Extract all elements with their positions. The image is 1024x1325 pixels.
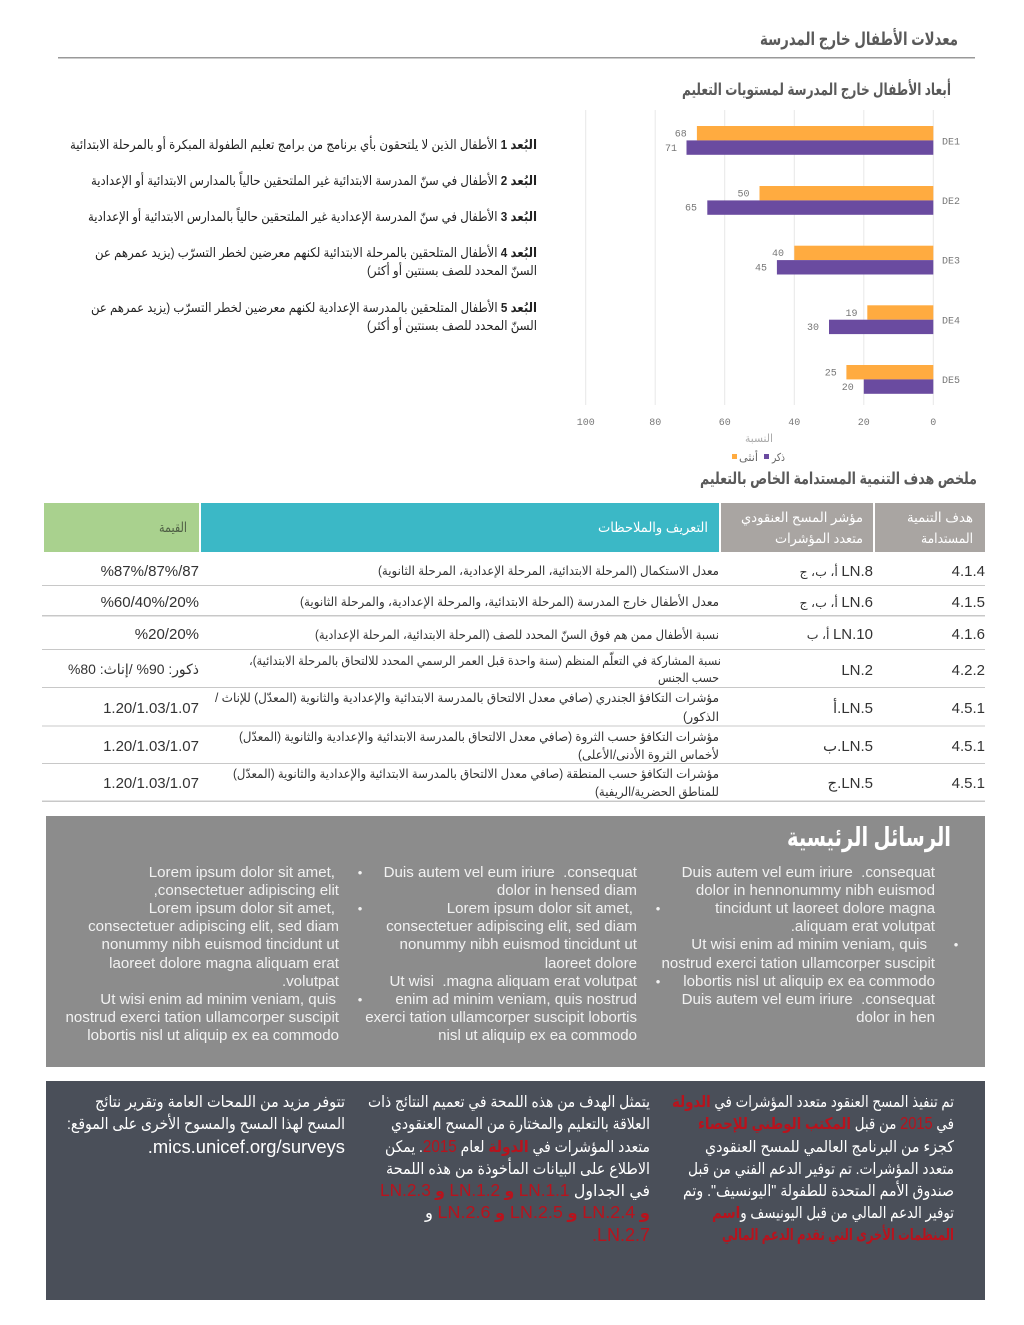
row 4.5.1 gender [103, 691, 985, 725]
row 4.5.1 region: مؤشرات التكافؤ حسب المنطقة (صافي معدل الالتحاق بالمدرسة الابتدائية والإعدادية والثانوية (المعدّل) [233, 767, 719, 782]
category labels: DE3 [942, 256, 960, 268]
row 4.1.5: %60/40%/20% [101, 594, 199, 611]
value labels: 19 [845, 309, 858, 320]
value labels: 71 [665, 144, 677, 155]
row 4.2.2: LN.2 [841, 662, 873, 679]
text block: dimension definitions: البُعد 1 الأطفال الذين لا يلتحقون بأي برنامج من برامج تعليم الطفولة المبكرة أو بالمرحلة الابتدائية [70, 135, 537, 153]
table header: هدف التنمية [907, 510, 973, 525]
row 4.1.4: %87%/87%/87 [101, 563, 199, 580]
axis labels: 80 [649, 418, 661, 429]
key messages: right column: .aliquam erat volutpat [791, 918, 936, 935]
key messages: left column: Lorem ipsum dolor sit amet, [149, 864, 335, 881]
survey notes: middle column: و LN.2.4 و LN.2.5 و LN.2.6 و [424, 1202, 650, 1223]
bar chart [577, 110, 960, 464]
key messages: middle column: exerci tation ullamcorper suscipit lobortis [365, 1009, 637, 1026]
table row lines [42, 585, 985, 802]
row 4.5.1 region [103, 767, 985, 800]
row 4.1.5 [101, 594, 985, 611]
row 4.5.1 wealth: 4.5.1 [952, 738, 985, 755]
survey notes: right column [672, 1094, 954, 1245]
survey notes: middle column: في الجداول LN.1.1 و LN.1.2 و LN.2.3 [380, 1180, 650, 1201]
survey notes: right column: في 2015 من قبل المكتب الوطني للإحصاء [698, 1113, 954, 1134]
axis labels: 40 [788, 418, 800, 429]
value labels: 30 [807, 323, 819, 334]
key messages: middle column: Lorem ipsum dolor sit amet, [447, 900, 633, 917]
table header [44, 503, 985, 552]
key messages: left column: ,consectetuer adipiscing elit [154, 882, 340, 899]
key messages: middle column: laoreet dolore [545, 955, 637, 972]
row 4.1.5: 4.1.5 [952, 594, 985, 611]
axis labels: 20 [858, 418, 870, 429]
key messages: left column [66, 864, 340, 1044]
text block: dimension definitions: البُعد 2 الأطفال في سنّ المدرسة الابتدائية غير الملتحقين حالياً بالمدارس الابتدائية أو الإعدادية [91, 171, 537, 189]
key messages: left column: consectetuer adipiscing elit, sed diam [88, 918, 339, 935]
survey notes: right column: صندوق الأمم المتحدة للطفولة "اليونسيف". وتم [683, 1180, 954, 1201]
key messages: right column: nostrud exerci tation ullamcorper suscipit [662, 955, 936, 972]
key messages: middle column: • [358, 901, 363, 916]
row 4.1.5: LN.6 أ، ب، ج [800, 594, 873, 611]
key messages: middle column: • [358, 865, 363, 880]
key messages: right column: Ut wisi enim ad minim veniam, quis [691, 936, 927, 953]
row 4.5.1 region: 1.20/1.03/1.07 [103, 775, 199, 792]
panel: survey notes [46, 1081, 985, 1300]
row 4.2.2 [68, 651, 985, 686]
table header: متعدد المؤشرات [775, 531, 863, 547]
survey notes: right column: متعدد المؤشرات. تم توفير الدعم الفني من قبل [688, 1161, 954, 1179]
table header: المستدامة [921, 531, 973, 546]
value labels: 50 [737, 190, 750, 200]
axis labels: 100 [577, 418, 595, 429]
legend: أنثى [739, 450, 758, 464]
survey notes: right column: توفير الدعم المالي من قبل اليونيسف واسم [712, 1205, 954, 1223]
key messages: middle column: Duis autem vel eum iriure .consequat [384, 864, 638, 881]
row 4.2.2: ذكور: ‏90‏% /إناث: ‏80‏% [68, 661, 199, 678]
row 4.5.1 gender: LN.5.أ [833, 698, 873, 717]
row 4.1.4 [101, 563, 985, 580]
key messages: middle column: enim ad minim veniam, quis nostrud [395, 991, 637, 1008]
key messages: right column: • [656, 901, 661, 916]
key messages heading: الرسائل الرئيسية [787, 822, 951, 853]
key messages: right column: • [656, 974, 661, 989]
survey notes: middle column: متعدد المؤشرات في الدولة لعام 2015. يمكن [385, 1136, 650, 1157]
row 4.1.6: 4.1.6 [952, 626, 985, 643]
axis labels [577, 418, 936, 429]
text block: dimension definitions [70, 135, 537, 334]
value labels: 68 [675, 130, 687, 140]
text block: dimension definitions: السنّ المحدد للصف بسنتين أو أكثر) [367, 317, 537, 334]
text block: dimension definitions: البُعد 3 الأطفال في سنّ المدرسة الإعدادية غير الملتحقين حالياً بالمدارس الابتدائية أو الإعدادية [88, 207, 537, 225]
row 4.5.1 gender: الذكور) [683, 710, 719, 725]
row 4.5.1 region: 4.5.1 [952, 775, 985, 792]
title: معدلات الأطفال خارج المدرسة [760, 28, 958, 50]
axis labels: 0 [930, 418, 936, 429]
key messages: left column: Ut wisi enim ad minim veniam, quis [100, 991, 336, 1008]
row 4.5.1 wealth: 1.20/1.03/1.07 [103, 738, 199, 755]
key messages: left column: nonummy nibh euismod tincidunt ut [102, 936, 340, 953]
text block: dimension definitions: البُعد 4 الأطفال المتلحقين بالمرحلة الابتدائية لكنهم معرضين لخطر التسرّب (يزيد عمرهم عن [95, 244, 537, 261]
row 4.5.1 wealth [103, 730, 985, 763]
row 4.1.6: %20/20% [135, 626, 199, 643]
table: SDG summary [42, 503, 985, 802]
row 4.5.1 region: LN.5.ج [827, 775, 873, 793]
key messages: middle column: • [358, 992, 363, 1007]
key messages: right column: dolor in hennonummy nibh euismod [696, 882, 935, 899]
key messages: middle column: consectetuer adipiscing elit, sed diam [386, 918, 637, 935]
row 4.1.6: LN.10 أ، ب [807, 626, 873, 643]
value labels: 20 [842, 383, 854, 394]
survey notes: middle column: الاطلاع على البيانات المأخوذة من هذه اللمحة [386, 1157, 650, 1179]
value labels: 45 [755, 264, 767, 274]
key messages: middle column [358, 864, 638, 1044]
row 4.5.1 wealth: مؤشرات التكافؤ حسب الثروة (صافي معدل الالتحاق بالمدرسة الابتدائية والإعدادية والثانوية (المعدّل) [239, 730, 719, 745]
value labels [665, 130, 858, 394]
survey notes: left column [67, 1094, 345, 1157]
bars: male [686, 140, 933, 394]
table header: مؤشر المسح العنقودي [741, 510, 863, 526]
category labels: DE2 [942, 197, 960, 208]
key messages: right column: dolor in hen [856, 1009, 935, 1026]
key messages: middle column: nonummy nibh euismod tincidunt ut [400, 936, 638, 953]
key messages: middle column: dolor in hensed diam [497, 882, 637, 899]
key messages: left column: laoreet dolore magna aliquam erat [109, 955, 340, 972]
row 4.1.4: LN.8 أ، ب، ج [800, 563, 873, 580]
row 4.5.1 gender: مؤشرات التكافؤ الجندري (صافي معدل الالتحاق بالمدرسة الابتدائية والإعدادية والثانوية (المعدّل) للإناث / [215, 691, 719, 706]
table header: التعريف والملاحظات [598, 520, 708, 536]
value labels: 25 [825, 368, 837, 380]
key messages: right column: • [954, 937, 959, 952]
row 4.2.2: حسب الجنس [658, 671, 719, 686]
legend: ذكر [771, 452, 785, 464]
category labels [942, 138, 960, 387]
legend [732, 450, 785, 464]
text block: dimension definitions: البُعد 5 الأطفال المتلحقين بالمدرسة الإعدادية لكنهم معرضين لخطر التسرّب (يزيد عمرهم عن [91, 299, 537, 316]
category labels: DE1 [942, 138, 960, 148]
key messages: right column [656, 864, 959, 1026]
row 4.5.1 wealth: LN.5.ب [823, 738, 873, 755]
row 4.5.1 gender: 1.20/1.03/1.07 [103, 700, 199, 717]
value labels: 65 [685, 204, 697, 214]
table header: القيمة [159, 520, 187, 535]
survey notes: right column: تم تنفيذ المسح العنقود متعدد المؤشرات في الدولة [672, 1094, 954, 1112]
survey notes: middle column [368, 1094, 650, 1245]
key messages: right column: Duis autem vel eum iriure .consequat [682, 991, 936, 1008]
survey notes: right column: كجزء من البرنامج العالمي للمسح العنقودي [705, 1139, 954, 1157]
survey notes: middle column: LN.2.7. [592, 1225, 650, 1245]
axis title: النسبة [745, 433, 773, 445]
key messages: right column: Duis autem vel eum iriure .consequat [682, 864, 936, 881]
row 4.5.1 gender: 4.5.1 [952, 700, 985, 717]
key messages: middle column: nisl ut aliquip ex ea commodo [438, 1027, 637, 1044]
row 4.2.2: 4.2.2 [952, 662, 985, 679]
category labels: DE5 [942, 376, 960, 387]
row 4.1.5: معدل الأطفال خارج المدرسة (المرحلة الابتدائية، والمرحلة الإعدادية، والمرحلة الثانوية) [300, 594, 719, 610]
survey notes: middle column: يتمثل الهدف من هذه اللمحة في تعميم النتائج ذات [368, 1094, 650, 1112]
survey notes: left column: mics.unicef.org/surveys. [148, 1136, 345, 1157]
text block: dimension definitions: السنّ المحدد للصف بسنتين أو أكثر) [367, 262, 537, 279]
row 4.5.1 wealth: لأخماس الثروة الأدنى/الأعلى) [578, 747, 719, 763]
row 4.1.6 [135, 626, 985, 643]
key messages: left column: .volutpat [282, 973, 340, 990]
row 4.5.1 region: للمناطق الحضرية/الريفية) [595, 785, 719, 800]
key messages: left column: Lorem ipsum dolor sit amet, [149, 900, 335, 917]
row 4.2.2: نسبة المشاركة في التعلّم المنظم (سنة واحدة قبل العمر الرسمي المحدد للالتحاق بالمرحلة الابتدائية)، [249, 651, 721, 669]
row 4.1.4: 4.1.4 [952, 563, 985, 580]
axis labels: 60 [719, 418, 731, 429]
survey notes: left column: المسح لهذا المسح والمسوح الأخرى على الموقع: [67, 1113, 345, 1134]
key messages: right column: lobortis nisl ut aliquip ex ea commodo [683, 973, 935, 990]
survey notes: left column: تتوفر مزيد من اللمحات العامة وتقرير نتائج [95, 1094, 345, 1112]
panel: key messages [46, 816, 985, 1067]
row 4.1.4: معدل الاستكمال (المرحلة الابتدائية، المرحلة الإعدادية، المرحلة الثانوية) [378, 564, 719, 579]
survey notes: middle column: العلاقة بالتعليم والمختارة من المسح العنقودي [391, 1116, 650, 1134]
key messages: left column: nostrud exerci tation ullamcorper suscipit [66, 1009, 340, 1026]
value labels: 40 [772, 249, 784, 260]
row 4.1.6: نسبة الأطفال ممن هم فوق السنّ المحدد للصف (المرحلة الابتدائية، المرحلة الإعدادية) [315, 627, 719, 643]
key messages: left column: lobortis nisl ut aliquip ex ea commodo [87, 1027, 339, 1044]
key messages: right column: tincidunt ut laoreet dolore magna [715, 900, 936, 917]
key messages: middle column: Ut wisi .magna aliquam erat volutpat [390, 973, 638, 990]
category labels: DE4 [942, 316, 960, 328]
bars: female [697, 126, 933, 379]
